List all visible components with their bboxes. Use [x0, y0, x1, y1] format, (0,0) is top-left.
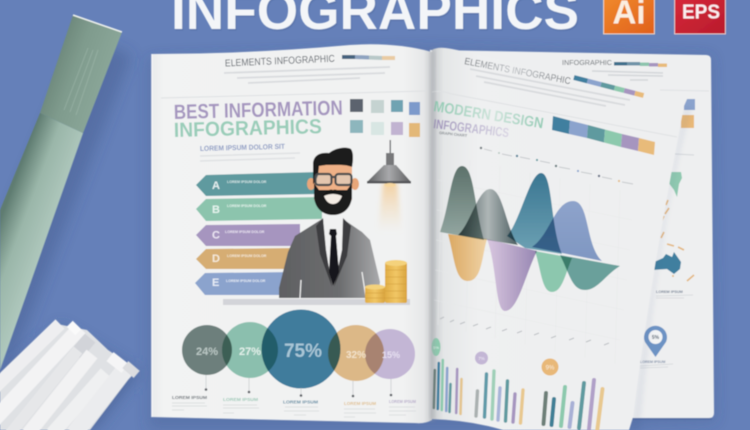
- heading: infographics: INFOGRAPHICS: [174, 115, 322, 142]
- heading: best information: BEST INFORMATION: [174, 97, 343, 124]
- pin caption: LOREM IPSUM: [640, 360, 665, 364]
- necktie: [329, 229, 339, 286]
- axis ticks: [440, 317, 609, 345]
- shelf bar: [223, 299, 410, 305]
- peak: periwinkle: [532, 201, 602, 261]
- back page colour swatches: [681, 99, 695, 128]
- lapels: [316, 218, 351, 287]
- rolled green tube: [0, 15, 132, 395]
- value: 75%: 75%: [284, 341, 322, 362]
- circle captions: LOREM IPSUM: [283, 400, 318, 404]
- left page: [152, 44, 432, 423]
- gutter shadow: [430, 50, 435, 420]
- map fragments: [652, 172, 694, 281]
- arrow A: [196, 172, 320, 196]
- lamp: [367, 140, 411, 232]
- arrow A: LOREM IPSUM DOLOR: [227, 180, 267, 184]
- area chart: [440, 166, 620, 311]
- map caption: LOREM IPSUM: [656, 290, 683, 294]
- arrow E: E: [212, 277, 219, 289]
- circle chart: [182, 310, 415, 388]
- value: 24%: 24%: [196, 346, 218, 358]
- bar group one: [434, 360, 462, 414]
- circle captions: LOREM IPSUM: [172, 395, 207, 400]
- map caption: [656, 290, 693, 298]
- heading: infographics right: INFOGRAPHICS: [433, 116, 510, 140]
- bubble: purple: 7%: [478, 356, 485, 361]
- arrow B: [196, 197, 322, 221]
- left colour strip: [342, 55, 395, 60]
- pin caption: [640, 360, 673, 368]
- arrow D: D: [212, 253, 220, 265]
- right colour strip: [573, 75, 644, 98]
- trough: dark teal: [560, 255, 620, 290]
- trough: purple: [487, 239, 537, 311]
- value: 15%: 15%: [382, 350, 400, 360]
- arrow B: B: [212, 204, 220, 216]
- bubble: orange: [542, 358, 558, 376]
- front right page: [431, 48, 692, 430]
- circle captions: LOREM IPSUM: [389, 399, 416, 404]
- glasses: [316, 174, 352, 185]
- back page colour strip: [614, 62, 667, 67]
- bar group three: [544, 380, 602, 430]
- arrow C: C: [212, 230, 220, 242]
- coins: [365, 260, 407, 303]
- peak: teal: [507, 173, 562, 254]
- bubble: purple: [475, 352, 488, 364]
- arrow A: A: [212, 180, 220, 192]
- back page: [430, 50, 714, 419]
- icon: EPS badge: [674, 0, 726, 34]
- face: [314, 160, 352, 200]
- heading: modern design: MODERN DESIGN: [432, 98, 545, 132]
- arrow C: LOREM IPSUM DOLOR: [225, 230, 265, 234]
- bubble: green: 5%: [433, 345, 439, 350]
- right heading: ELEMENTS INFOGRAPHIC: [463, 56, 572, 87]
- trough: orange: [448, 234, 487, 281]
- ears: [307, 178, 315, 190]
- value: 32%: 32%: [346, 350, 366, 361]
- peak: dark grey: [440, 166, 484, 240]
- white rolled papers: [0, 323, 140, 430]
- arrow D: LOREM IPSUM DOLOR: [227, 254, 267, 258]
- trough: mint: [535, 251, 572, 292]
- left heading: ELEMENTS INFOGRAPHIC: [225, 54, 335, 69]
- arrow C: [196, 224, 300, 246]
- map pin: [644, 326, 667, 357]
- graph chart label: GRAPH CHART: [439, 131, 468, 138]
- bubble: orange: 9%: [546, 366, 555, 372]
- businessman character: [279, 148, 380, 298]
- bubble: green: [432, 338, 440, 356]
- circle captions: [172, 375, 416, 417]
- value: 27%: 27%: [239, 346, 261, 358]
- peak: silver grey: [458, 189, 518, 245]
- icon: Adobe Illustrator badge: [604, 0, 654, 34]
- back page heading: INFOGRAPHIC: [562, 60, 612, 67]
- icon: EPS badge: EPS: [682, 2, 720, 24]
- hair: [313, 148, 353, 184]
- arm gaps: [300, 272, 366, 298]
- chart gridlines: [434, 155, 632, 364]
- arrow E: [195, 272, 295, 295]
- bar group two: [476, 371, 523, 423]
- subheading: LOREM IPSUM DOLOR SIT: [200, 142, 286, 153]
- beard: [314, 183, 352, 215]
- moustache: [322, 190, 344, 196]
- arrow E: LOREM IPSUM DOLOR: [226, 279, 266, 283]
- colour blocks: [552, 116, 655, 155]
- jacket: [279, 219, 380, 298]
- shirt: [323, 218, 344, 286]
- colour swatches: [350, 99, 420, 137]
- map pin: 5%: [652, 335, 660, 341]
- magazine drop shadow: [148, 48, 716, 430]
- arrow B: LOREM IPSUM DOLOR: [227, 204, 267, 208]
- mouth: [324, 194, 342, 204]
- circle captions: LOREM IPSUM: [344, 401, 376, 406]
- circle captions: LOREM IPSUM: [223, 397, 258, 402]
- chart legend: [480, 147, 633, 184]
- arrow D: [196, 248, 295, 269]
